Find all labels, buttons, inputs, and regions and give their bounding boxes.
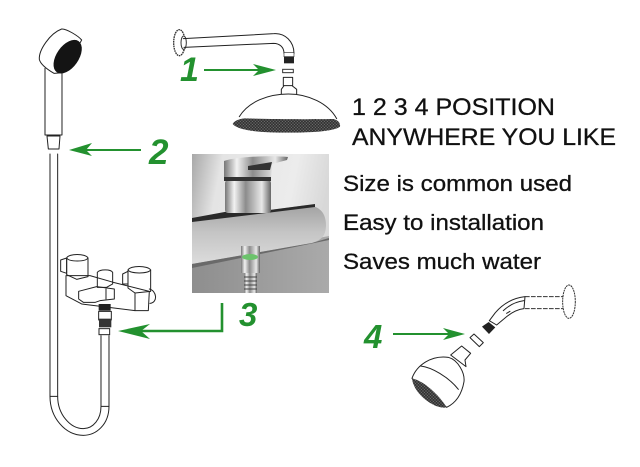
number 3: 3 [239,296,257,333]
heading: 1 2 3 4 POSITION [352,94,555,121]
feature list [343,171,572,274]
shower arm [183,34,294,53]
heading: ANYWHERE YOU LIKE [352,124,616,151]
washer [470,334,483,347]
number 2: 2 [148,133,169,172]
number 1: 1 [180,51,199,89]
photo: chrome mixer with green-ring hose [192,154,329,293]
feature list: Saves much water [343,249,541,274]
heading [352,94,616,151]
number 4: 4 [363,318,382,355]
feature list: Size is common used [343,171,572,196]
washer [283,69,293,73]
connector [281,77,297,94]
illustration: rain shower arm and head [174,30,340,133]
hand shower head [39,29,88,149]
arrow 1: green arrow pointing to the washer [204,64,276,76]
wall flange [563,285,575,318]
mixer valve [61,254,156,335]
arrow 3: green elbow pointing to the mixer [118,303,222,339]
illustration: hand shower with hose and mixer [39,29,156,435]
wall flange [174,30,185,56]
feature list: Easy to installation [343,210,544,235]
dome [239,94,337,119]
shower head [451,346,471,367]
arrow 2: green arrow pointing to the hand shower [69,143,141,156]
illustration: fixed shower head and arm [412,285,575,408]
hose [50,154,109,435]
shower arm [525,297,563,309]
arrow 4: green arrow pointing to the washer [393,328,465,340]
rose [233,118,340,133]
